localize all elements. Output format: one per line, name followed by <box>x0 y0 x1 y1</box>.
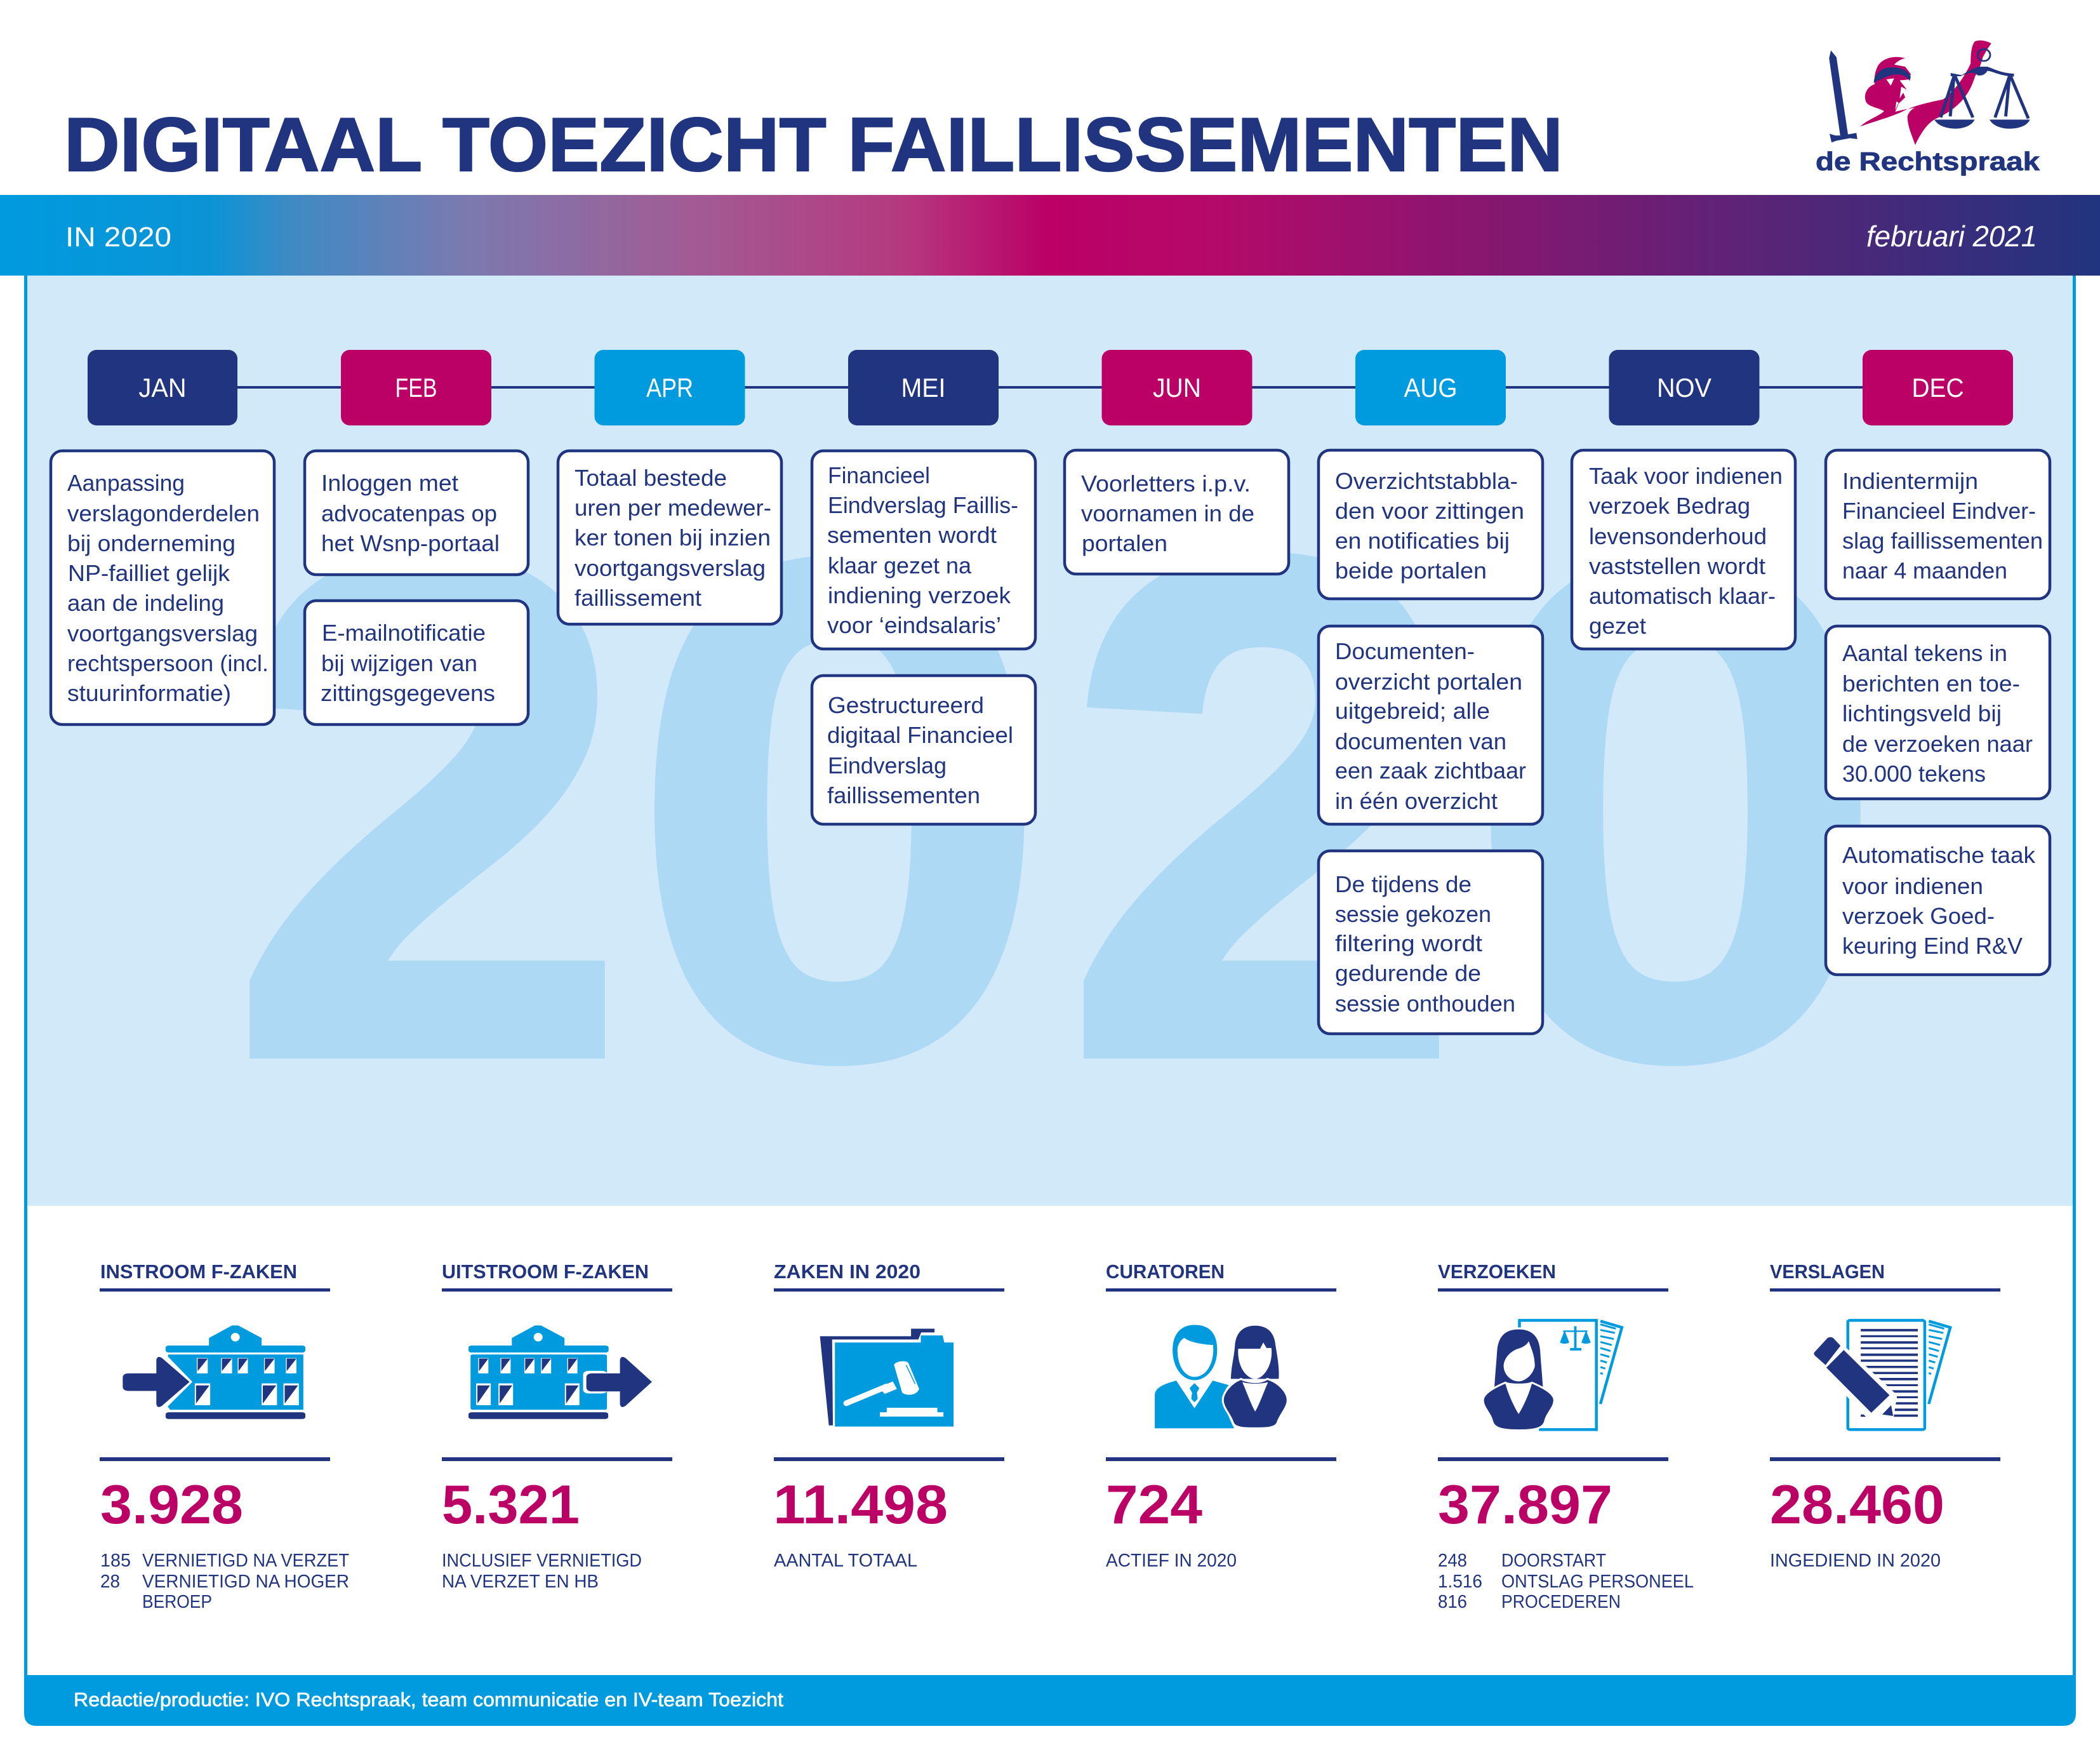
text box: AUG 1: beide portalen <box>1335 558 1487 584</box>
month: DEC <box>1863 350 2013 425</box>
text box: JAN: aan de indeling <box>67 590 224 616</box>
text box: JUN: portalen <box>1082 530 1167 556</box>
big year 2020: 2 <box>1069 417 1458 1198</box>
text box: DEC 1 <box>1826 450 2050 599</box>
stat: uitstroom: NA VERZET EN HB <box>442 1572 599 1592</box>
month: MEI: MEI <box>901 373 946 403</box>
stat: zaken <box>773 1260 1004 1571</box>
text box: AUG 2: documenten van <box>1335 728 1506 754</box>
text box: NOV: Taak voor indienen <box>1589 463 1783 489</box>
text box: AUG 3: sessie onthouden <box>1335 991 1515 1017</box>
text box: DEC 1: Indientermijn <box>1842 468 1978 494</box>
icon: pencil and document <box>1814 1320 1950 1429</box>
text box: FEB 1 <box>305 451 528 575</box>
text box: NOV <box>1572 450 1795 649</box>
text box: NOV: levensonderhoud <box>1589 523 1767 549</box>
stat: instroom <box>100 1260 349 1612</box>
text box: FEB 1: het Wsnp-portaal <box>321 530 500 556</box>
text box: FEB 1: advocatenpas op <box>321 500 497 526</box>
text box: DEC 2: 30.000 tekens <box>1842 761 1986 787</box>
text box: APR <box>558 451 781 624</box>
stat: curatoren: ACTIEF IN 2020 <box>1106 1551 1237 1571</box>
text box: JAN: voortgangsverslag <box>67 620 258 646</box>
stat: uitstroom: 5.321 <box>442 1474 580 1535</box>
stat: instroom: 185 <box>100 1551 131 1571</box>
stat: verzoeken: VERZOEKEN <box>1438 1260 1556 1283</box>
text box: MEI 2: digitaal Financieel <box>827 722 1013 748</box>
text box: DEC 1: slag faillissementen <box>1842 528 2043 554</box>
text box: DEC 1: Financieel Eindver- <box>1842 498 2036 524</box>
month: FEB: FEB <box>395 373 437 403</box>
timeline line <box>163 386 1937 389</box>
text box: JAN: verslagonderdelen <box>67 500 260 526</box>
gradient band <box>0 195 2100 276</box>
icon: building with incoming arrow <box>123 1325 305 1419</box>
text box: DEC 3: voor indienen <box>1842 873 1983 899</box>
icon: folder with gavel <box>820 1328 954 1427</box>
stat: instroom: BEROEP <box>142 1592 212 1612</box>
text box: APR: uren per medewer- <box>575 495 771 521</box>
text box: MEI 1: Financieel <box>828 462 930 488</box>
text box: DEC 3 <box>1826 826 2050 975</box>
stat: verslagen: INGEDIEND IN 2020 <box>1770 1551 1941 1571</box>
stat: curatoren: 724 <box>1106 1474 1202 1535</box>
stat: verzoeken: PROCEDEREN <box>1501 1592 1621 1612</box>
text box: APR: voortgangsverslag <box>575 555 766 581</box>
text box: NOV: verzoek Bedrag <box>1589 493 1750 519</box>
stat: verslagen: 28.460 <box>1770 1474 1944 1535</box>
logo: de Rechtspraak: de Rechtspraak <box>1816 147 2040 176</box>
icon: building with outgoing arrow <box>469 1325 652 1419</box>
title: DIGITAAL TOEZICHT FAILLISSEMENTEN <box>64 102 1563 187</box>
month: APR <box>594 350 745 425</box>
stat: verslagen <box>1770 1260 2000 1571</box>
big year 2020 <box>235 411 1887 1206</box>
text box: AUG 3 <box>1319 851 1543 1034</box>
text box: MEI 2: Gestructureerd <box>828 692 984 718</box>
text box: AUG 1: en notificaties bij <box>1335 528 1510 554</box>
month: APR: APR <box>646 373 693 403</box>
stat: instroom: INSTROOM F-ZAKEN <box>100 1260 297 1283</box>
text box: FEB 1: Inloggen met <box>321 470 458 496</box>
text box: AUG 2: een zaak zichtbaar <box>1335 758 1526 784</box>
month: NOV: NOV <box>1657 373 1711 403</box>
text box: MEI 1: klaar gezet na <box>828 552 972 578</box>
stat: verzoeken: 1.516 <box>1438 1572 1482 1592</box>
month: NOV <box>1609 350 1760 425</box>
footer: Redactie/productie: IVO Rechtspraak, team communicatie en IV-team Toezicht <box>74 1688 783 1711</box>
text box: AUG 3: sessie gekozen <box>1335 901 1491 927</box>
text box: MEI 2 <box>812 676 1035 824</box>
stat: curatoren: CURATOREN <box>1106 1260 1225 1283</box>
text box: AUG 1 <box>1319 450 1543 599</box>
text box: MEI 1: sementen wordt <box>827 522 997 548</box>
month: DEC: DEC <box>1912 373 1964 403</box>
stat: uitstroom <box>442 1260 672 1592</box>
text box: FEB 2: E-mailnotificatie <box>322 620 486 646</box>
text box: JAN: NP-failliet gelijk <box>68 560 230 586</box>
stat: instroom: VERNIETIGD NA VERZET <box>142 1551 349 1571</box>
stat: instroom: 3.928 <box>100 1474 243 1535</box>
text box: NOV: automatisch klaar- <box>1589 583 1776 609</box>
text box: AUG 2: in één overzicht <box>1335 788 1498 814</box>
logo: de Rechtspraak <box>1816 41 2040 176</box>
stat: verzoeken <box>1438 1260 1694 1612</box>
text box: AUG 3: filtering wordt <box>1335 930 1482 956</box>
text box: FEB 2 <box>305 601 528 725</box>
text box: DEC 3: verzoek Goed- <box>1842 903 1995 929</box>
text box: MEI 2: faillissementen <box>827 782 980 808</box>
icon: woman with document <box>1483 1320 1622 1431</box>
stat: verzoeken: 37.897 <box>1438 1474 1612 1535</box>
stat: verslagen: VERSLAGEN <box>1770 1260 1885 1283</box>
icon: man and woman <box>1155 1325 1287 1428</box>
subtitle: IN 2020 <box>65 222 171 253</box>
month: JUN <box>1102 350 1252 425</box>
text box: MEI 1: indiening verzoek <box>828 582 1011 608</box>
stat: curatoren <box>1106 1260 1336 1571</box>
text box: DEC 1: naar 4 maanden <box>1842 558 2007 584</box>
month: AUG: AUG <box>1404 373 1458 403</box>
stat: verzoeken: 816 <box>1438 1592 1467 1612</box>
text box: AUG 2: Documenten- <box>1335 638 1475 664</box>
text box: JUN: voornamen in de <box>1081 500 1254 526</box>
text box: AUG 3: De tijdens de <box>1335 871 1472 897</box>
stat: zaken: ZAKEN IN 2020 <box>774 1260 920 1283</box>
month: JAN: JAN <box>138 373 187 403</box>
text box: AUG 1: Overzichtstabbla- <box>1335 468 1518 494</box>
month: JUN: JUN <box>1153 373 1201 403</box>
big year 2020: 0 <box>628 411 1051 1206</box>
stat: verzoeken: DOORSTART <box>1501 1551 1606 1571</box>
footer <box>24 1675 2076 1726</box>
text box: JAN: rechtspersoon (incl. <box>67 650 269 676</box>
text box: JAN: Aanpassing <box>67 470 185 496</box>
stat: instroom: VERNIETIGD NA HOGER <box>142 1572 349 1592</box>
big year 2020: 0 <box>1465 411 1887 1206</box>
text box: DEC 2: lichtingsveld bij <box>1842 700 2002 726</box>
text box: JUN: Voorletters i.p.v. <box>1081 471 1251 497</box>
text box: AUG 2 <box>1319 626 1543 824</box>
stat: zaken: AANTAL TOTAAL <box>774 1551 917 1571</box>
text box: NOV: vaststellen wordt <box>1589 553 1765 579</box>
text box: AUG 2: uitgebreid; alle <box>1335 698 1490 724</box>
text box: APR: faillissement <box>575 585 701 611</box>
text box: FEB 2: zittingsgegevens <box>321 680 495 706</box>
text box: APR: ker tonen bij inzien <box>575 524 771 551</box>
stat: uitstroom: INCLUSIEF VERNIETIGD <box>442 1551 642 1571</box>
text box: JAN: stuurinformatie) <box>67 680 231 706</box>
text box: DEC 2 <box>1826 626 2050 799</box>
text box: DEC 2: de verzoeken naar <box>1842 731 2033 757</box>
date: februari 2021 <box>1866 220 2037 253</box>
text box: DEC 2: Aantal tekens in <box>1842 640 2007 666</box>
stat: zaken: 11.498 <box>773 1474 948 1535</box>
panel: timeline <box>25 276 2075 1206</box>
month: AUG <box>1355 350 1506 425</box>
stat: instroom: 28 <box>100 1572 120 1592</box>
big year 2020: 2 <box>235 417 623 1198</box>
text box: MEI 1: voor ‘eindsalaris’ <box>827 612 1001 638</box>
text box: DEC 2: berichten en toe- <box>1842 671 2020 697</box>
outer frame <box>25 276 2075 1708</box>
stat: verzoeken: 248 <box>1438 1551 1467 1571</box>
stat: uitstroom: UITSTROOM F-ZAKEN <box>442 1260 649 1283</box>
text box: MEI 1: Eindverslag Faillis- <box>828 492 1018 518</box>
text box: FEB 2: bij wijzigen van <box>321 650 477 676</box>
text box: AUG 3: gedurende de <box>1335 960 1481 986</box>
text box: AUG 2: overzicht portalen <box>1335 669 1522 695</box>
text box: MEI 1 <box>812 451 1035 649</box>
text box: JAN: bij onderneming <box>67 530 236 556</box>
text box: AUG 1: den voor zittingen <box>1335 498 1524 524</box>
text box: MEI 2: Eindverslag <box>828 752 947 778</box>
month: JAN <box>88 350 237 425</box>
text box: JUN <box>1065 450 1289 574</box>
text box: APR: Totaal bestede <box>575 465 727 491</box>
text box: NOV: gezet <box>1589 613 1646 639</box>
text box: JAN <box>51 451 274 725</box>
month: MEI <box>848 350 999 425</box>
text box: DEC 3: Automatische taak <box>1842 842 2036 868</box>
month: FEB <box>341 350 491 425</box>
stat: verzoeken: ONTSLAG PERSONEEL <box>1501 1572 1694 1592</box>
text box: DEC 3: keuring Eind R&V <box>1842 933 2023 959</box>
